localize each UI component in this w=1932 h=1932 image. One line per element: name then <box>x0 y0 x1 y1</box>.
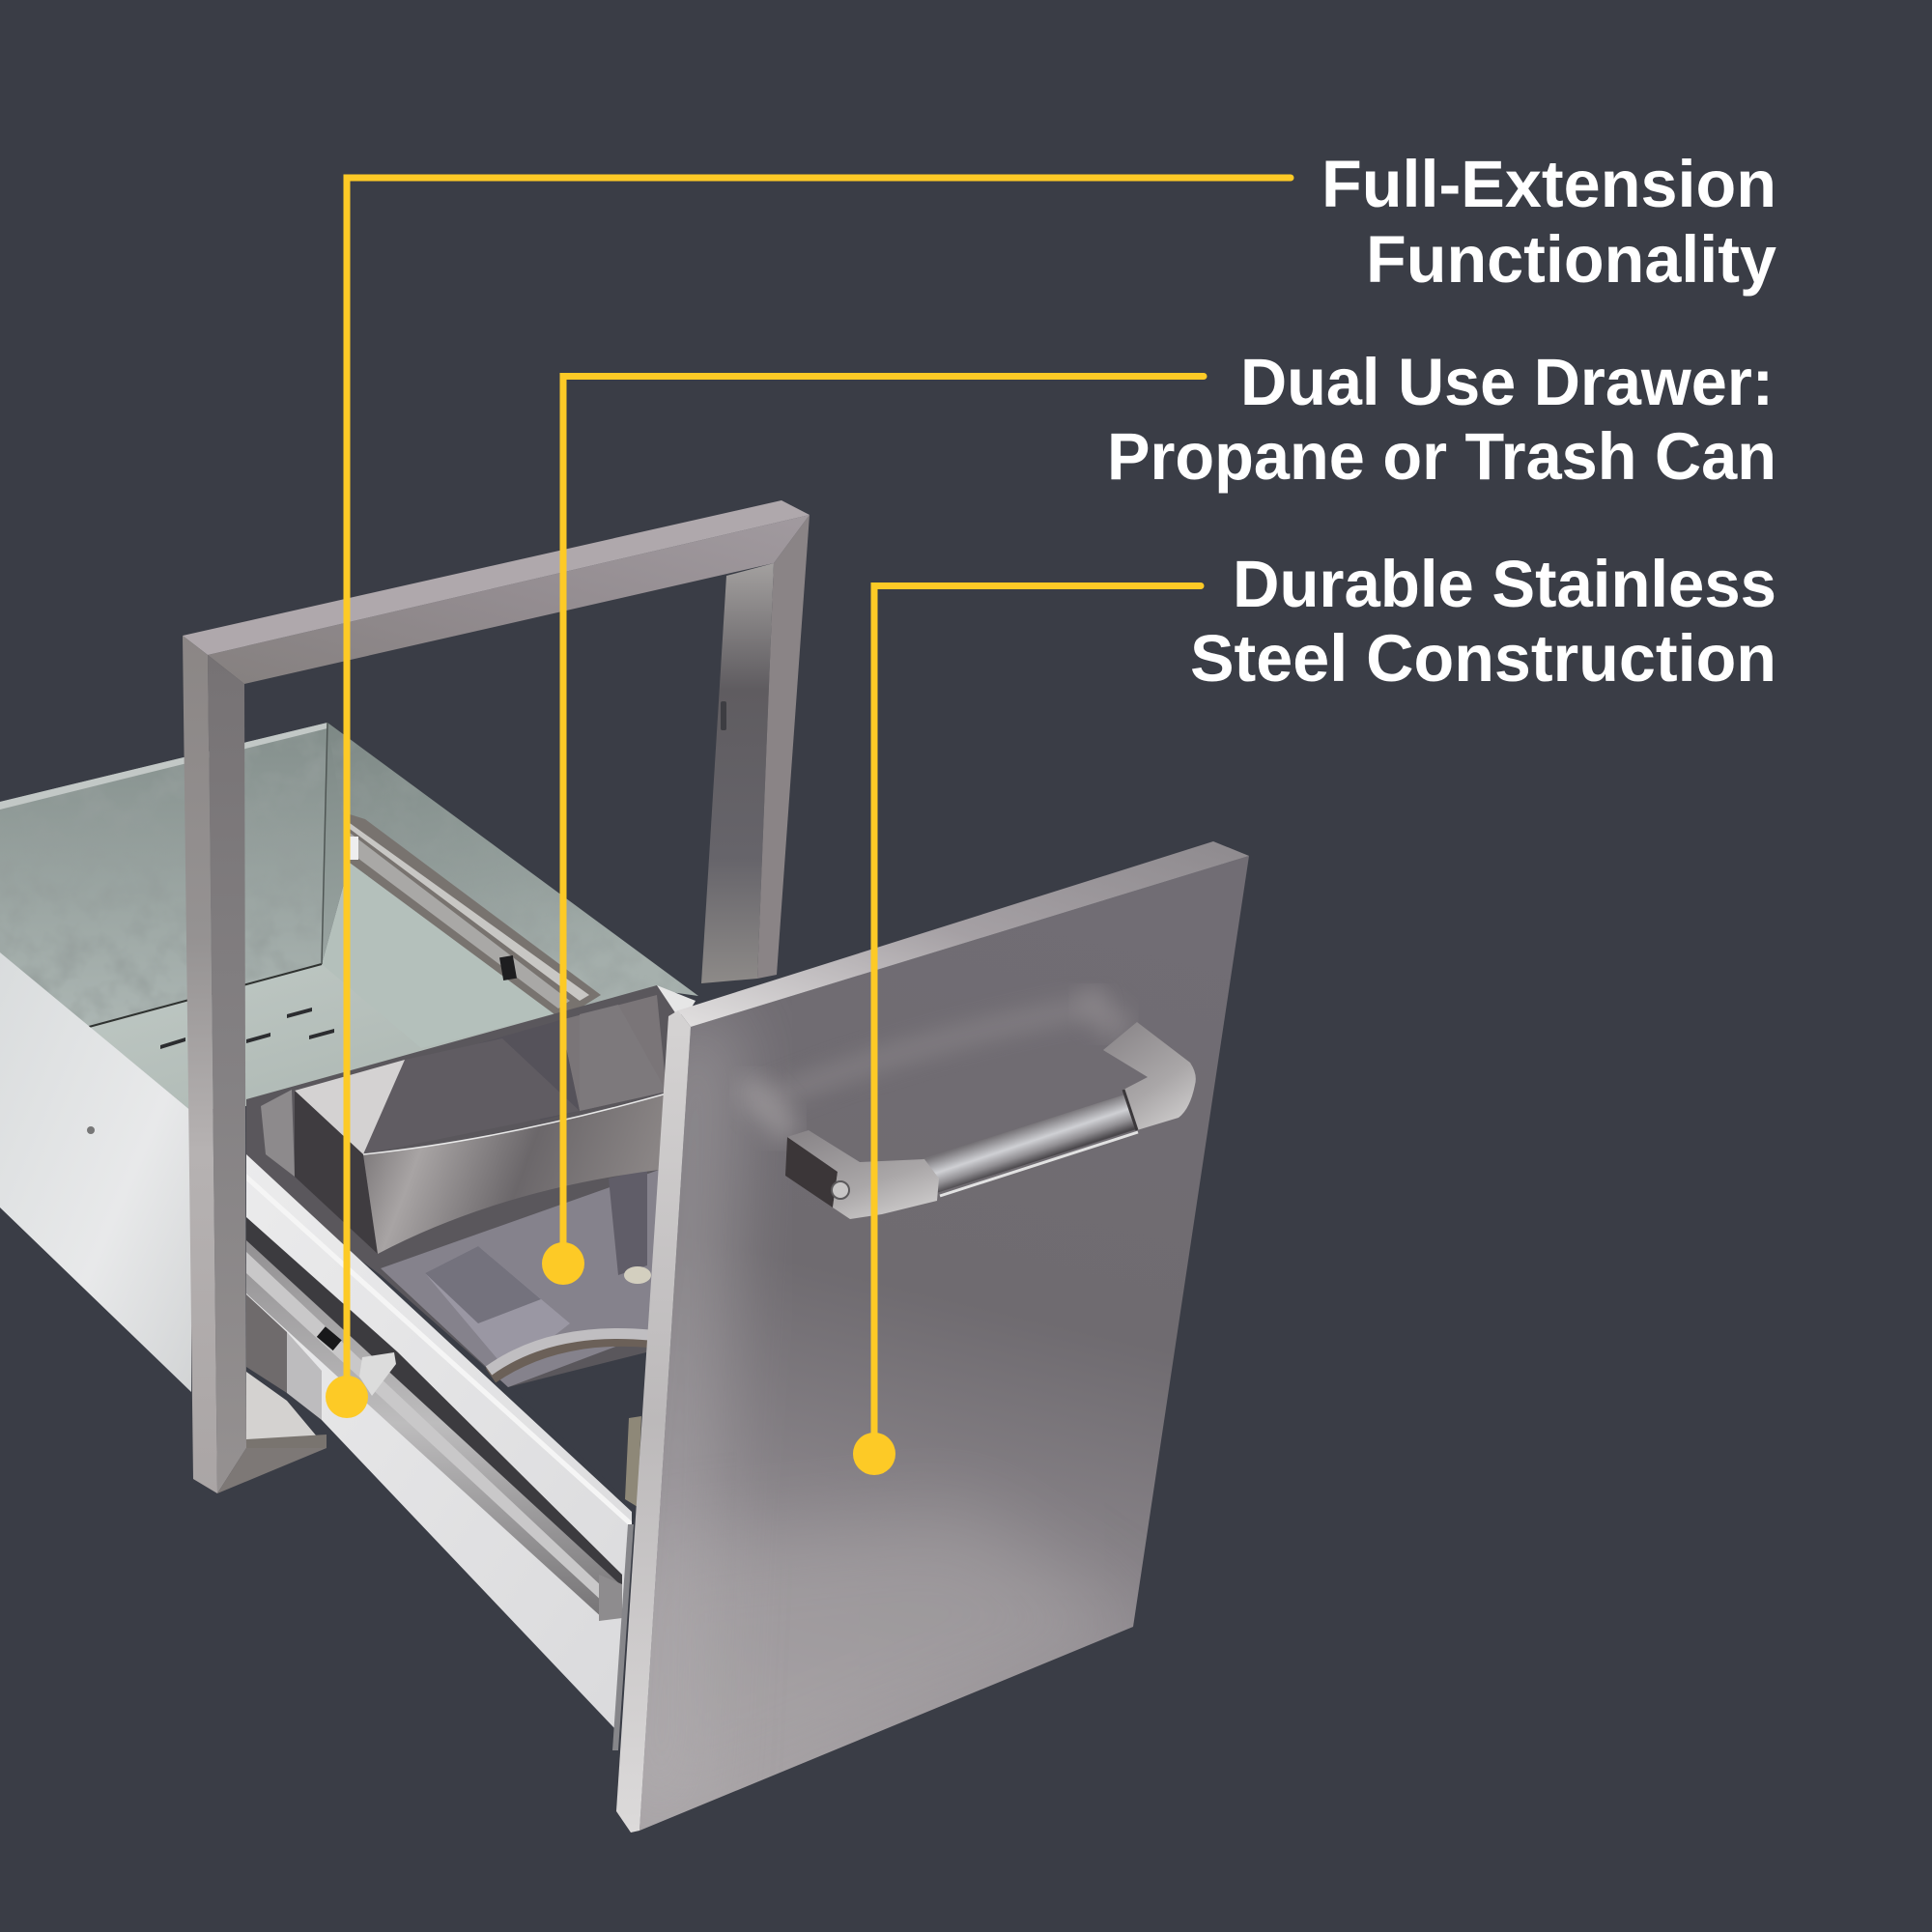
label: Full-Extension Functionality <box>1321 147 1776 297</box>
door handle <box>785 1022 1196 1219</box>
door panel <box>616 841 1249 1855</box>
upright post <box>625 1416 641 1507</box>
label: Durable Stainless Steel Construction: Durable Stainless <box>1233 547 1776 621</box>
frame right side <box>701 515 810 983</box>
upper drawer slide rail <box>349 814 601 1014</box>
lower drawer slide rail <box>246 1217 622 1621</box>
thin door-side strip <box>612 1524 634 1750</box>
ring <box>491 1338 649 1376</box>
callout: dual use leader line <box>542 377 1204 1285</box>
label: Full-Extension Functionality: Full-Extension <box>1321 147 1776 221</box>
frame left and top <box>183 500 810 1493</box>
opening below ring <box>514 1354 647 1526</box>
callout: full-extension leader line <box>326 178 1291 1418</box>
label: Dual Use Drawer: Propane or Trash Can: Dual Use Drawer: <box>1240 345 1774 419</box>
galvanized drawer box <box>0 723 698 1392</box>
label: Durable Stainless Steel Construction: Steel Construction <box>1190 621 1776 696</box>
callout: stainless steel leader line <box>853 585 1201 1475</box>
label: Full-Extension Functionality: Functionality <box>1366 222 1776 297</box>
curved steel bracket <box>261 1005 667 1254</box>
product photo: stainless drawer <box>0 500 1249 1855</box>
ring highlight <box>489 1334 649 1371</box>
tray: polished inner compartment <box>246 985 696 1387</box>
label: Dual Use Drawer: Propane or Trash Can <box>1107 345 1776 494</box>
label: Durable Stainless Steel Construction <box>1190 547 1776 696</box>
label: Dual Use Drawer: Propane or Trash Can: Propane or Trash Can <box>1107 419 1776 494</box>
pull-out side panel <box>246 1154 632 1728</box>
